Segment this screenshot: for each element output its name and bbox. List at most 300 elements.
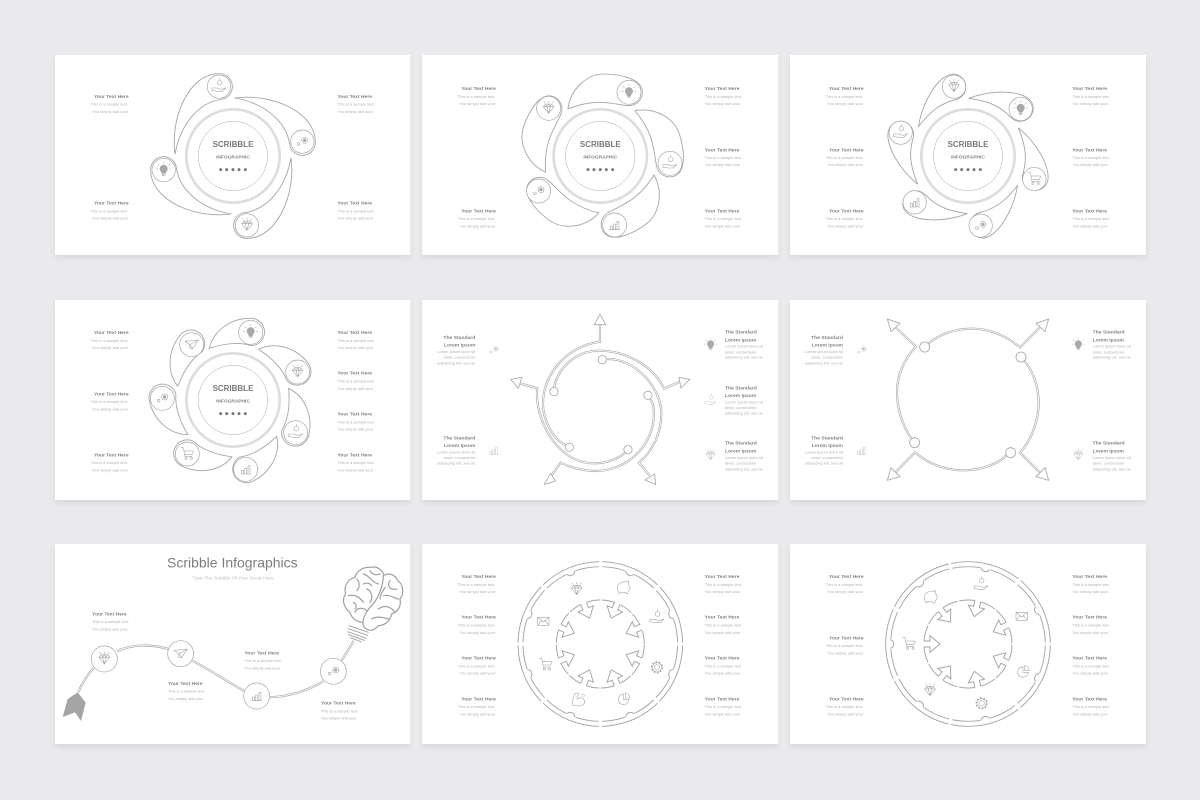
text: right three: Your Text Here xyxy=(337,412,372,418)
text: right four: This is a sample text. xyxy=(337,460,375,465)
text: right bottom: The Standard xyxy=(725,441,757,447)
icon: hand coin xyxy=(284,421,308,445)
icon: gears xyxy=(969,214,992,237)
text: right three xyxy=(705,656,742,676)
text: right middle: You simply add your xyxy=(705,162,741,167)
text: left top: You simply add your xyxy=(827,101,864,106)
text: left middle: This is a sample text. xyxy=(91,399,128,404)
icon: hand coin xyxy=(705,394,716,404)
panel: five-petal scribble xyxy=(422,55,778,255)
text: left top: amet, consectetur xyxy=(444,355,476,360)
text: left one: You simply add your xyxy=(460,589,496,594)
text: left top: The Standard xyxy=(811,335,843,341)
hub xyxy=(186,109,280,203)
text: right three: Your Text Here xyxy=(705,656,740,662)
text: right bottom xyxy=(1072,208,1110,228)
panel: six-petal scribble xyxy=(790,55,1146,255)
text: right middle: Your Text Here xyxy=(705,147,740,153)
text: right middle: This is a sample text. xyxy=(705,155,742,160)
text: left bottom: adipiscing elit, sed do xyxy=(437,461,476,466)
text: right top: This is a sample text. xyxy=(705,94,742,99)
node: plane xyxy=(168,641,194,667)
text: right bottom xyxy=(1093,441,1132,471)
text: right two: Your Text Here xyxy=(705,615,740,621)
hub: SCRIBBLE xyxy=(213,384,254,393)
text: right one: This is a sample text. xyxy=(705,582,742,587)
text: right bottom: amet, consectetur xyxy=(1093,461,1125,466)
icon: pie xyxy=(1018,666,1029,677)
text: left top: Lorem ipsum dolor sit xyxy=(437,349,476,354)
text: step one xyxy=(92,611,129,631)
subtitle: Type The Subtitle Of Your Great Here xyxy=(192,575,274,581)
text: left top: You simply add your xyxy=(92,345,129,350)
outer wheel xyxy=(518,562,683,726)
text: right four: Your Text Here xyxy=(1072,696,1107,702)
text: right two: Your Text Here xyxy=(1072,615,1107,621)
text: left bottom: Your Text Here xyxy=(461,208,496,214)
icon: gear xyxy=(976,698,987,709)
text: right two: This is a sample text. xyxy=(705,623,742,628)
text: right top: Your Text Here xyxy=(1072,86,1107,92)
text: top right: You simply add your xyxy=(337,109,374,114)
text: left two: This is a sample text. xyxy=(458,623,495,628)
text: top right: Your Text Here xyxy=(337,94,372,100)
text: step two: You simply add your xyxy=(168,696,204,701)
panel: seven-segment wheel xyxy=(790,544,1146,744)
text: bottom left xyxy=(91,201,129,221)
text: right two: You simply add your xyxy=(337,386,374,391)
text: left middle: You simply add your xyxy=(827,650,864,655)
text: right top: Lorem ipsum dolor sit xyxy=(1093,344,1132,349)
text: right two: You simply add your xyxy=(1072,630,1109,635)
text: left top: You simply add your xyxy=(827,589,864,594)
icon: gears xyxy=(527,179,551,203)
text: right middle: Your Text Here xyxy=(1072,147,1107,153)
text: left top: amet, consectetur xyxy=(811,355,844,360)
text: left four xyxy=(458,696,496,716)
text: step four: This is a sample text. xyxy=(321,708,358,713)
text: left top: This is a sample text. xyxy=(458,94,495,99)
icon: diamond xyxy=(571,582,582,595)
text: left one: This is a sample text. xyxy=(458,582,495,587)
text: left top: Lorem Ipsum xyxy=(444,343,476,349)
icon: hand coin xyxy=(650,610,664,623)
icon: mail xyxy=(538,617,549,625)
text: left bottom: amet, consectetur xyxy=(811,455,844,460)
text: right two: You simply add your xyxy=(705,630,741,635)
text: left two: Your Text Here xyxy=(461,615,496,621)
text: top right: This is a sample text. xyxy=(337,102,375,107)
text: right bottom xyxy=(705,208,742,228)
outer wheel xyxy=(886,562,1050,726)
text: right top: amet, consectetur xyxy=(725,349,757,354)
text: right top: The Standard xyxy=(1093,330,1125,336)
text: right middle xyxy=(725,385,764,416)
node: bars xyxy=(244,683,270,709)
text: top right xyxy=(337,94,375,114)
icon: gears xyxy=(490,347,498,353)
text: right top xyxy=(705,86,742,106)
panel: spiral arrows xyxy=(422,300,778,500)
hub: INFOGRAPHIC xyxy=(216,154,250,160)
petals xyxy=(151,74,315,238)
text: bottom right: You simply add your xyxy=(337,216,374,221)
text: left top: Your Text Here xyxy=(94,330,129,336)
text: left four: Your Text Here xyxy=(461,696,496,702)
text: left bottom: Lorem Ipsum xyxy=(444,443,476,449)
text: right top xyxy=(725,330,764,360)
text: right four: This is a sample text. xyxy=(705,704,742,709)
text: left bottom: Lorem ipsum dolor sit xyxy=(437,449,476,454)
text: left two: You simply add your xyxy=(460,630,496,635)
icon: cart xyxy=(175,442,199,466)
icon: cart xyxy=(903,638,915,649)
text: right bottom: This is a sample text. xyxy=(1072,216,1110,221)
text: right bottom: This is a sample text. xyxy=(705,216,742,221)
hub xyxy=(921,109,1015,203)
text: right two: Your Text Here xyxy=(337,371,372,377)
icon: muscle xyxy=(572,693,585,706)
text: right one: You simply add your xyxy=(337,345,374,350)
text: right top: You simply add your xyxy=(1072,101,1109,106)
text: right middle: amet, consectetur xyxy=(725,405,757,410)
text: left bottom: You simply add your xyxy=(460,223,496,228)
node: gears xyxy=(320,658,346,684)
text: right one xyxy=(1072,574,1110,594)
icon: diamond xyxy=(942,75,966,98)
title: Scribble Infographics xyxy=(167,554,298,570)
text: right bottom: amet, consectetur xyxy=(725,461,757,466)
text: right middle: Lorem Ipsum xyxy=(725,393,757,399)
icon: bulb xyxy=(152,158,175,182)
icon: hand coin xyxy=(658,151,682,175)
text: left top: This is a sample text. xyxy=(91,338,128,343)
text: left bottom: Your Text Here xyxy=(829,208,864,214)
icon: diamond xyxy=(1074,449,1083,460)
text: left top: Lorem ipsum dolor sit xyxy=(805,349,844,354)
icon: bars xyxy=(489,447,498,454)
text: step one: This is a sample text. xyxy=(92,619,129,624)
text: left bottom: The Standard xyxy=(443,435,475,441)
text: right top: Your Text Here xyxy=(705,86,740,92)
icon: gear xyxy=(651,662,662,673)
arrow tail xyxy=(63,692,86,721)
text: top left: Your Text Here xyxy=(94,94,129,100)
text: right middle xyxy=(1072,147,1110,167)
text: right top: adipiscing elit, sed do xyxy=(1093,355,1132,360)
inner ring with arrows xyxy=(924,599,1012,689)
icon: gears xyxy=(291,130,314,153)
text: right middle: You simply add your xyxy=(1072,162,1109,167)
panel: four-arrow circle xyxy=(790,300,1146,500)
text: right two xyxy=(337,371,375,391)
text: step three: Your Text Here xyxy=(244,650,279,656)
text: bottom right: Your Text Here xyxy=(337,201,372,207)
text: top left: You simply add your xyxy=(92,109,129,114)
text: left one xyxy=(458,574,496,594)
arrowheads and end nodes xyxy=(511,314,690,484)
text: left middle: This is a sample text. xyxy=(826,155,863,160)
text: right two: This is a sample text. xyxy=(337,379,375,384)
icon: plane xyxy=(180,333,204,357)
spiral lines xyxy=(520,324,681,477)
text: right three xyxy=(337,412,375,432)
brain bulb xyxy=(344,567,403,642)
text: left top xyxy=(437,335,476,365)
text: left bottom xyxy=(437,435,476,466)
text: left top: Lorem Ipsum xyxy=(812,343,844,349)
icon: pie xyxy=(618,693,630,705)
text: left top: You simply add your xyxy=(460,101,496,106)
icon: bulb xyxy=(617,80,641,104)
text: left top: Your Text Here xyxy=(829,86,864,92)
text: right two xyxy=(705,615,742,635)
text: right one: You simply add your xyxy=(705,589,741,594)
text: right two xyxy=(1072,615,1110,635)
text: right top: Lorem ipsum dolor sit xyxy=(725,344,764,349)
text: right four xyxy=(1072,696,1110,716)
text: left bottom: amet, consectetur xyxy=(444,455,476,460)
text: right one xyxy=(337,330,375,350)
text: left bottom xyxy=(826,696,864,716)
text: right bottom: You simply add your xyxy=(1072,223,1109,228)
icon: bulb xyxy=(239,320,263,344)
icon: hand coin xyxy=(974,576,988,589)
text: right bottom: You simply add your xyxy=(705,223,741,228)
text: step four: Your Text Here xyxy=(321,701,356,707)
text: left bottom: This is a sample text. xyxy=(91,460,128,465)
text: left four: This is a sample text. xyxy=(458,704,495,709)
text: right bottom: Lorem Ipsum xyxy=(725,448,757,454)
text: right four: Your Text Here xyxy=(705,696,740,702)
icon: bars xyxy=(857,447,866,454)
text: right middle: This is a sample text. xyxy=(1072,155,1110,160)
text: top left: This is a sample text. xyxy=(91,102,128,107)
text: right one xyxy=(705,574,742,594)
icon: bulb xyxy=(1009,97,1032,121)
text: right bottom: Lorem ipsum dolor sit xyxy=(1093,455,1132,460)
text: right middle: The Standard xyxy=(725,385,757,391)
text: left bottom xyxy=(805,435,844,466)
panel: four-petal scribble xyxy=(55,55,410,255)
icon: diamond xyxy=(286,360,310,384)
text: left bottom: You simply add your xyxy=(827,711,864,716)
circle arcs and stems xyxy=(894,327,1041,473)
text: right four xyxy=(705,696,742,716)
text: left bottom xyxy=(826,208,864,228)
text: left top: Your Text Here xyxy=(829,574,864,580)
icon: bars xyxy=(903,191,926,214)
text: left top: This is a sample text. xyxy=(826,94,863,99)
panel: brain bulb timeline xyxy=(55,544,410,744)
text: left top xyxy=(805,335,844,365)
text: right one: This is a sample text. xyxy=(337,338,375,343)
text: left middle: Your Text Here xyxy=(829,147,864,153)
panel: eight-segment wheel xyxy=(422,544,778,744)
icon: bulb xyxy=(704,338,717,350)
text: left bottom: Your Text Here xyxy=(94,452,129,458)
text: step one: You simply add your xyxy=(92,626,128,631)
icon: gears xyxy=(150,386,174,410)
text: step one: Your Text Here xyxy=(92,611,127,617)
hub: INFOGRAPHIC xyxy=(583,154,618,160)
petals xyxy=(872,72,1064,240)
icon: piggy xyxy=(617,581,630,594)
text: left middle: You simply add your xyxy=(827,162,864,167)
text: left middle xyxy=(826,147,864,167)
text: left middle: Your Text Here xyxy=(94,391,129,397)
text: left top xyxy=(91,330,129,350)
text: left bottom: You simply add your xyxy=(827,223,864,228)
text: left top xyxy=(826,574,864,594)
text: left top: The Standard xyxy=(443,335,475,341)
text: step two: This is a sample text. xyxy=(168,689,205,694)
text: right three: You simply add your xyxy=(1072,671,1109,676)
text: right middle xyxy=(705,147,742,167)
text: step two: Your Text Here xyxy=(168,681,203,687)
icon: cart xyxy=(1023,167,1046,191)
icon: hand coin xyxy=(889,121,912,144)
text: left top: Your Text Here xyxy=(461,86,496,92)
text: left three: You simply add your xyxy=(460,671,496,676)
text: left middle xyxy=(91,391,129,411)
text: left top: adipiscing elit, sed do xyxy=(437,360,476,365)
text: step two xyxy=(168,681,205,701)
inner ring with arrows xyxy=(556,600,644,688)
text: right one: Your Text Here xyxy=(1072,574,1107,580)
text: right top: adipiscing elit, sed do xyxy=(725,355,764,360)
text: right one: You simply add your xyxy=(1072,589,1109,594)
timeline path xyxy=(78,641,354,697)
hub: INFOGRAPHIC xyxy=(951,154,985,160)
text: left top: adipiscing elit, sed do xyxy=(805,360,844,365)
text: right bottom xyxy=(725,441,764,471)
text: left three xyxy=(458,656,496,676)
node: diamond xyxy=(91,646,117,672)
hub: INFOGRAPHIC xyxy=(216,398,250,404)
icon: hand coin xyxy=(207,75,231,98)
text: right top: You simply add your xyxy=(705,101,741,106)
text: left bottom xyxy=(458,208,496,228)
hub: SCRIBBLE xyxy=(213,140,254,149)
text: right top xyxy=(1093,330,1132,360)
text: right three: Your Text Here xyxy=(1072,656,1107,662)
text: step three xyxy=(244,650,282,670)
text: right two: This is a sample text. xyxy=(1072,623,1110,628)
hub: SCRIBBLE xyxy=(580,140,621,149)
text: right top: amet, consectetur xyxy=(1093,349,1125,354)
text: right bottom: adipiscing elit, sed do xyxy=(725,466,764,471)
petals xyxy=(146,318,318,487)
text: right top: Lorem Ipsum xyxy=(1093,337,1125,343)
icon: bars xyxy=(603,213,627,237)
icon: piggy xyxy=(924,591,937,603)
text: bottom left: This is a sample text. xyxy=(91,208,128,213)
text: bottom left: You simply add your xyxy=(92,216,129,221)
text: right three: This is a sample text. xyxy=(1072,663,1110,668)
icon: diamond xyxy=(706,449,715,460)
text: bottom right xyxy=(337,201,375,221)
text: right bottom: Lorem ipsum dolor sit xyxy=(725,455,764,460)
text: left two xyxy=(458,615,496,635)
text: right three: This is a sample text. xyxy=(337,419,375,424)
text: left bottom: This is a sample text. xyxy=(826,704,863,709)
icon: gears xyxy=(858,347,866,353)
text: right bottom: Your Text Here xyxy=(705,208,740,214)
text: left bottom: Lorem Ipsum xyxy=(812,443,844,449)
text: right four: You simply add your xyxy=(1072,711,1109,716)
text: step four xyxy=(321,701,358,721)
text: right bottom: adipiscing elit, sed do xyxy=(1093,466,1132,471)
hub xyxy=(186,353,280,447)
text: left middle: You simply add your xyxy=(92,406,129,411)
arrowheads and end nodes xyxy=(887,319,1049,480)
text: right one: Your Text Here xyxy=(705,574,740,580)
text: left bottom: Your Text Here xyxy=(829,696,864,702)
icon: cart xyxy=(539,658,552,670)
text: bottom left: Your Text Here xyxy=(94,201,129,207)
text: step three: This is a sample text. xyxy=(244,658,282,663)
text: left bottom: adipiscing elit, sed do xyxy=(805,461,844,466)
text: right four: This is a sample text. xyxy=(1072,704,1110,709)
text: right one: This is a sample text. xyxy=(1072,582,1110,587)
hub: SCRIBBLE xyxy=(948,140,989,149)
text: step three: You simply add your xyxy=(244,665,281,670)
text: left four: You simply add your xyxy=(460,711,496,716)
text: top left xyxy=(91,94,129,114)
text: left bottom: You simply add your xyxy=(92,467,129,472)
text: right four: You simply add your xyxy=(337,467,374,472)
text: right four: Your Text Here xyxy=(337,452,372,458)
text: right bottom: Your Text Here xyxy=(1072,208,1107,214)
text: right bottom: The Standard xyxy=(1093,441,1125,447)
text: bottom right: This is a sample text. xyxy=(337,208,375,213)
text: right bottom: Lorem Ipsum xyxy=(1093,448,1125,454)
text: left bottom: This is a sample text. xyxy=(458,216,495,221)
text: right four: You simply add your xyxy=(705,711,741,716)
text: left middle xyxy=(826,635,864,655)
text: left bottom xyxy=(91,452,129,472)
text: right top: Lorem Ipsum xyxy=(725,337,757,343)
text: left middle: This is a sample text. xyxy=(826,643,863,648)
icon: diamond xyxy=(537,96,561,120)
text: left top xyxy=(458,86,496,106)
text: right top: This is a sample text. xyxy=(1072,94,1110,99)
text: left bottom: This is a sample text. xyxy=(826,216,863,221)
text: left middle: Your Text Here xyxy=(829,635,864,641)
text: left bottom: Lorem ipsum dolor sit xyxy=(805,449,844,454)
text: right three xyxy=(1072,656,1110,676)
text: right three: You simply add your xyxy=(705,671,741,676)
text: step four: You simply add your xyxy=(321,716,357,721)
icon: bulb xyxy=(1072,338,1085,350)
text: right middle: Lorem ipsum dolor sit xyxy=(725,399,764,404)
text: left bottom: The Standard xyxy=(811,435,843,441)
icon: diamond xyxy=(925,683,935,696)
petals xyxy=(512,74,691,247)
text: right top xyxy=(1072,86,1110,106)
hub xyxy=(554,109,647,203)
icon: diamond xyxy=(235,214,259,237)
panel: seven-petal scribble xyxy=(55,300,410,500)
text: right three: This is a sample text. xyxy=(705,663,742,668)
text: left three: Your Text Here xyxy=(461,656,496,662)
text: right top: The Standard xyxy=(725,330,757,336)
text: right four xyxy=(337,452,375,472)
text: right middle: adipiscing elit, sed do xyxy=(725,411,764,416)
text: left three: This is a sample text. xyxy=(458,663,495,668)
text: left top xyxy=(826,86,864,106)
